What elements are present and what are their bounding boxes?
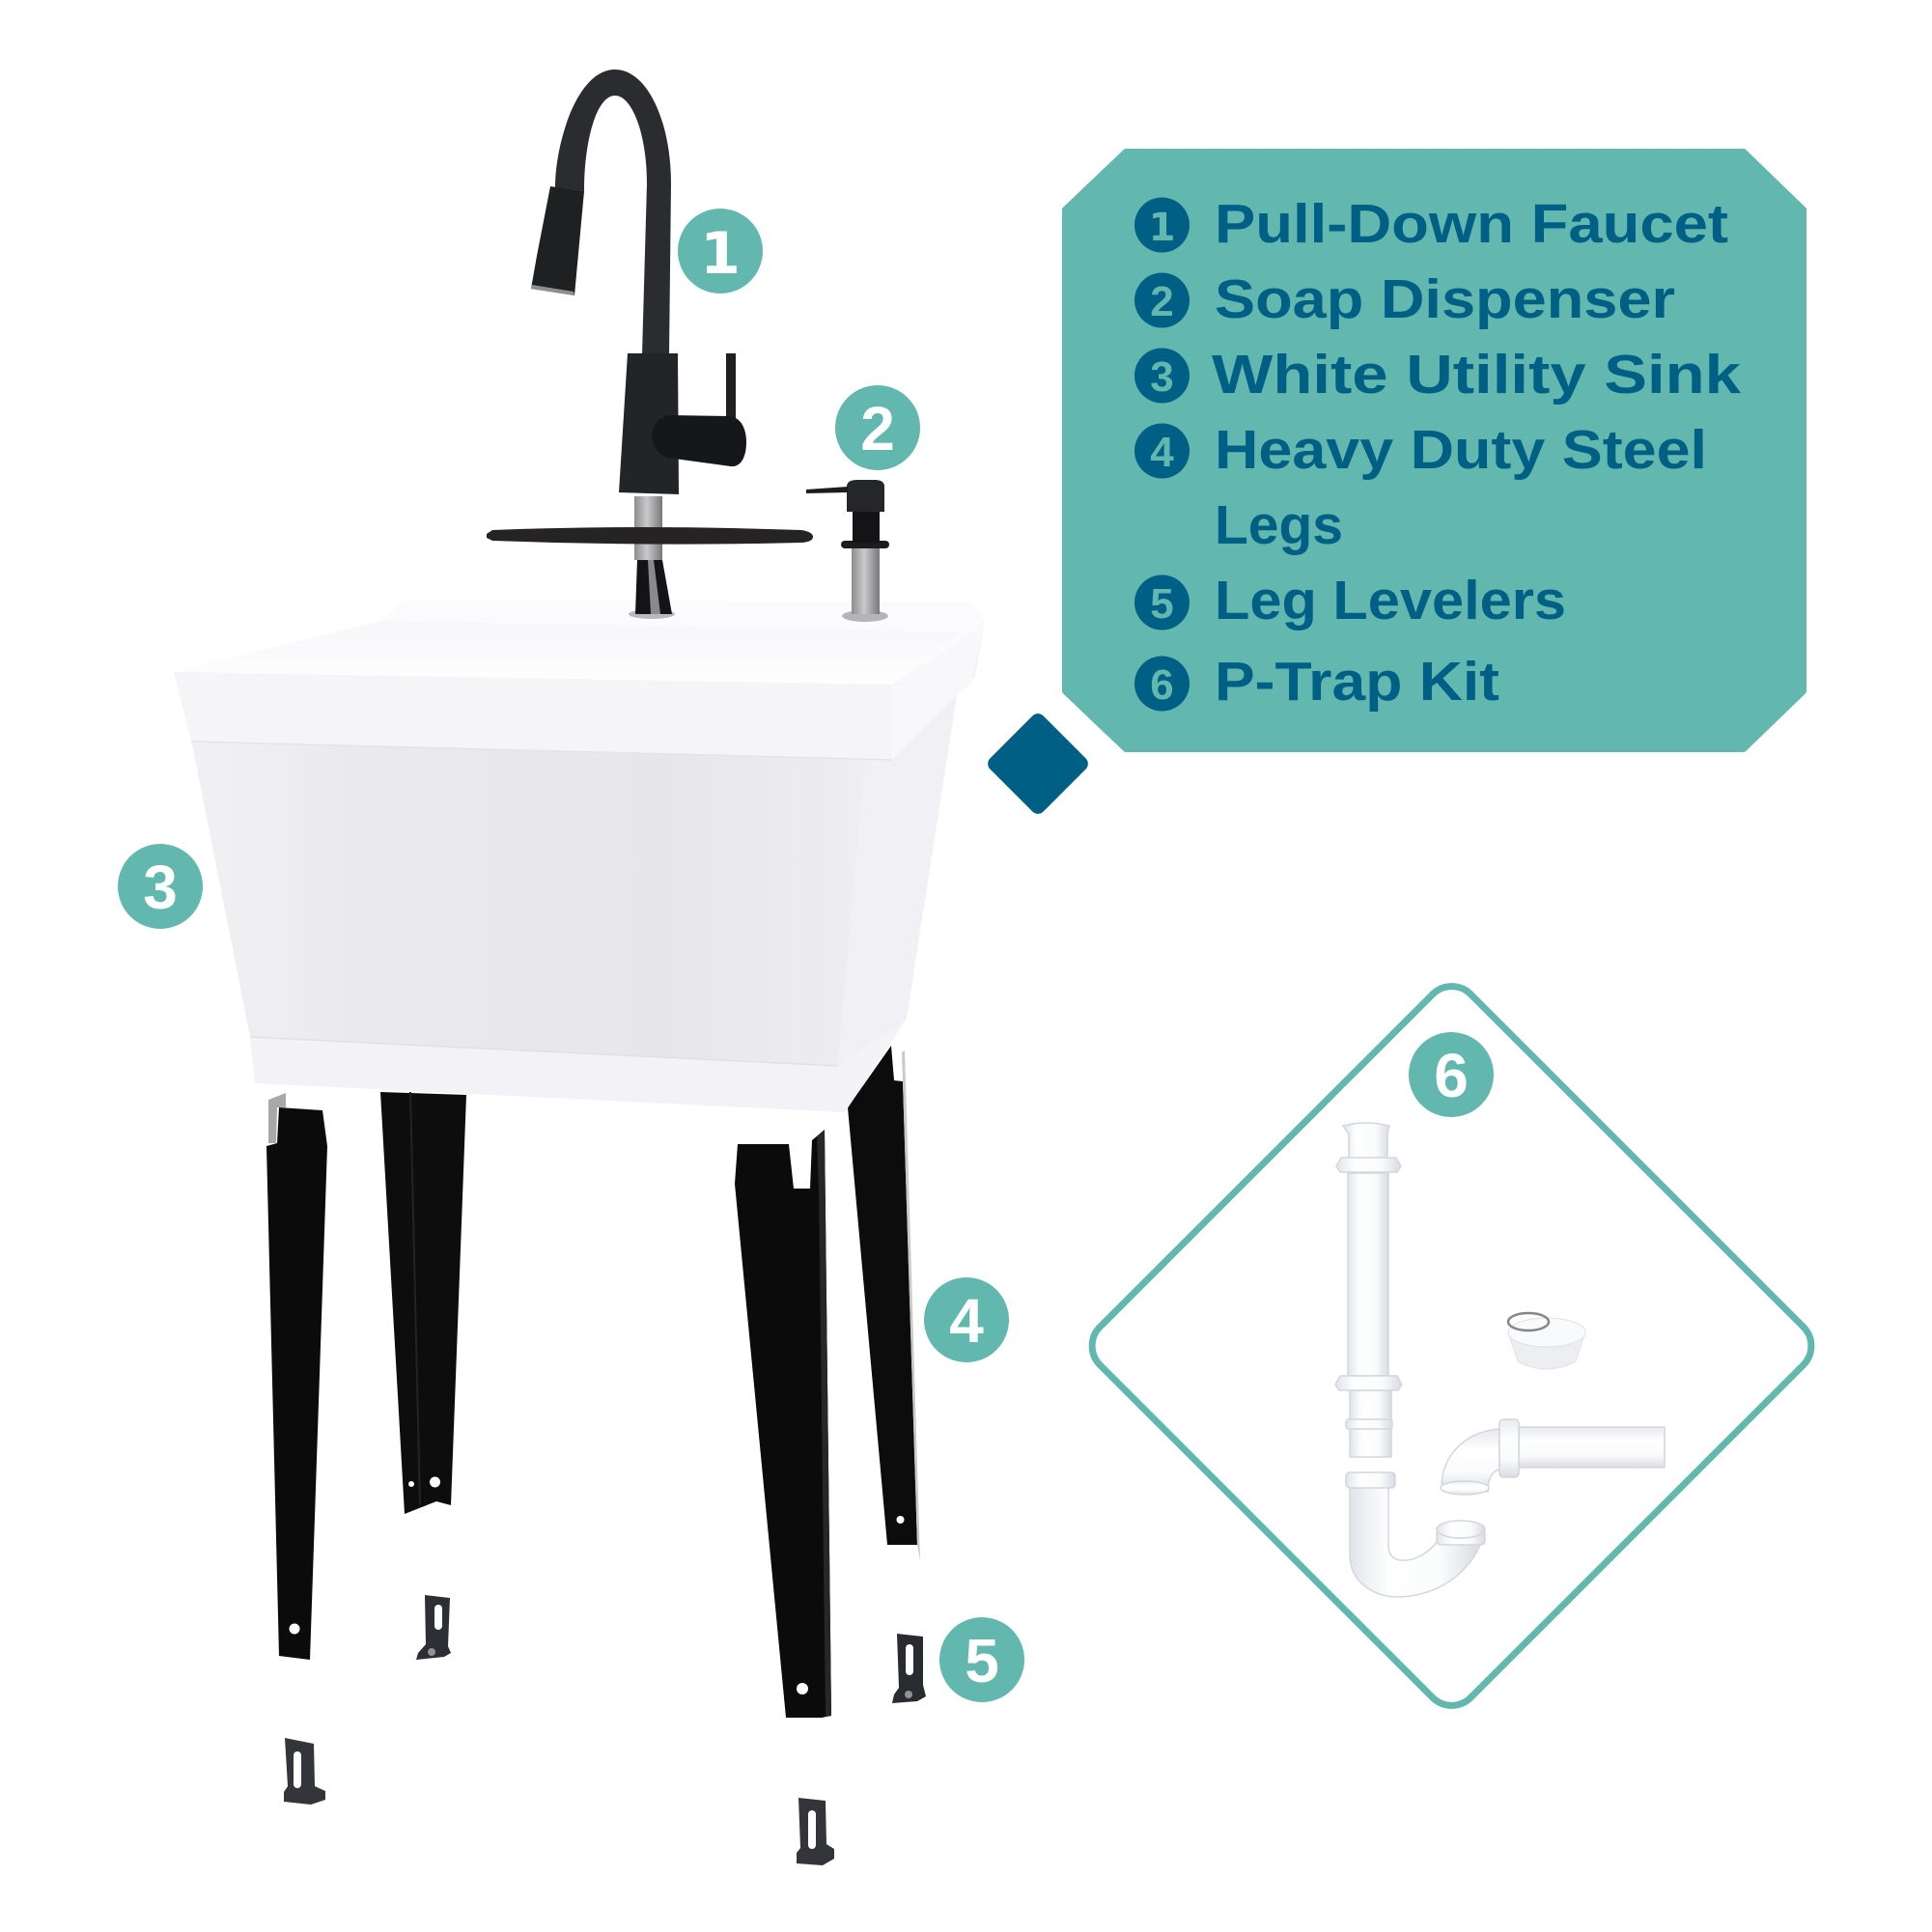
faucet gooseneck bbox=[555, 70, 671, 355]
number badge 6: 6 bbox=[1434, 1041, 1469, 1110]
sink leg: front left bbox=[266, 1093, 327, 1660]
legend item 4 bbox=[1134, 419, 1707, 556]
sink leg: front right bbox=[735, 1130, 831, 1718]
legend item 1: 1 bbox=[1149, 206, 1175, 250]
faucet hose bbox=[629, 560, 675, 619]
faucet deck plate bbox=[487, 527, 813, 545]
sink front body bbox=[191, 740, 865, 1066]
number badge 4: 4 bbox=[949, 1286, 984, 1356]
p-trap kit diamond frame bbox=[1081, 975, 1822, 1717]
small navy diamond bbox=[985, 711, 1091, 817]
legend item 1: Pull-Down Faucet bbox=[1215, 193, 1728, 255]
faucet body bbox=[619, 353, 679, 494]
number badge 1: 1 bbox=[700, 220, 741, 288]
number badge 5 bbox=[939, 1617, 1024, 1702]
sink right side bbox=[838, 621, 985, 1112]
sink bottom band bbox=[250, 1037, 845, 1112]
faucet lever bbox=[726, 353, 736, 419]
sink basin bbox=[174, 621, 963, 685]
number badge 3 bbox=[118, 844, 203, 929]
rubber stopper with ring bbox=[1508, 1313, 1585, 1369]
legend item 3: White Utility Sink bbox=[1212, 344, 1741, 406]
sink front rim bbox=[174, 672, 892, 760]
leg leveler: front left bbox=[284, 1738, 325, 1805]
legend item 2: 2 bbox=[1150, 278, 1174, 325]
number badge 2 bbox=[835, 385, 920, 470]
leg leveler: back right bbox=[892, 1634, 926, 1703]
number badge 3: 3 bbox=[143, 853, 178, 922]
legend item 5: 5 bbox=[1150, 580, 1174, 628]
faucet threaded shank bbox=[634, 496, 662, 560]
sink leg: back right bbox=[848, 1046, 920, 1560]
number badge 4 bbox=[924, 1277, 1009, 1362]
legend item 4: 4 bbox=[1150, 429, 1174, 476]
utility sink tub bbox=[174, 601, 985, 1112]
p-trap kit parts bbox=[1335, 1123, 1665, 1597]
soap dispenser bbox=[806, 480, 889, 622]
number badge 2: 2 bbox=[860, 394, 895, 463]
faucet bbox=[487, 70, 813, 619]
number badge 1 bbox=[678, 209, 763, 294]
panel background bbox=[1065, 152, 1804, 749]
leg leveler: front right bbox=[797, 1798, 834, 1865]
legend item 3: 3 bbox=[1150, 353, 1174, 401]
legend item 2: Soap Dispenser bbox=[1215, 268, 1675, 330]
legend item 4: Heavy Duty Steel bbox=[1215, 419, 1707, 481]
elbow and drain arm bbox=[1441, 1419, 1665, 1495]
faucet spray head bbox=[531, 186, 584, 295]
legend item 4: Legs bbox=[1215, 494, 1343, 556]
legend item 5: Leg Levelers bbox=[1215, 570, 1566, 631]
legend item 6: 6 bbox=[1150, 661, 1174, 709]
sink top deck bbox=[174, 601, 985, 685]
p-trap J bend bbox=[1346, 1472, 1485, 1597]
number badge 5: 5 bbox=[965, 1626, 999, 1695]
legend panel bbox=[1065, 152, 1804, 749]
number badge 6 bbox=[1409, 1032, 1494, 1117]
faucet handle bbox=[652, 415, 746, 466]
leg leveler: back left bbox=[416, 1595, 451, 1660]
sink leg: back left bbox=[380, 1092, 466, 1514]
tailpiece tube bbox=[1335, 1123, 1402, 1457]
legend item 6: P-Trap Kit bbox=[1215, 651, 1499, 713]
